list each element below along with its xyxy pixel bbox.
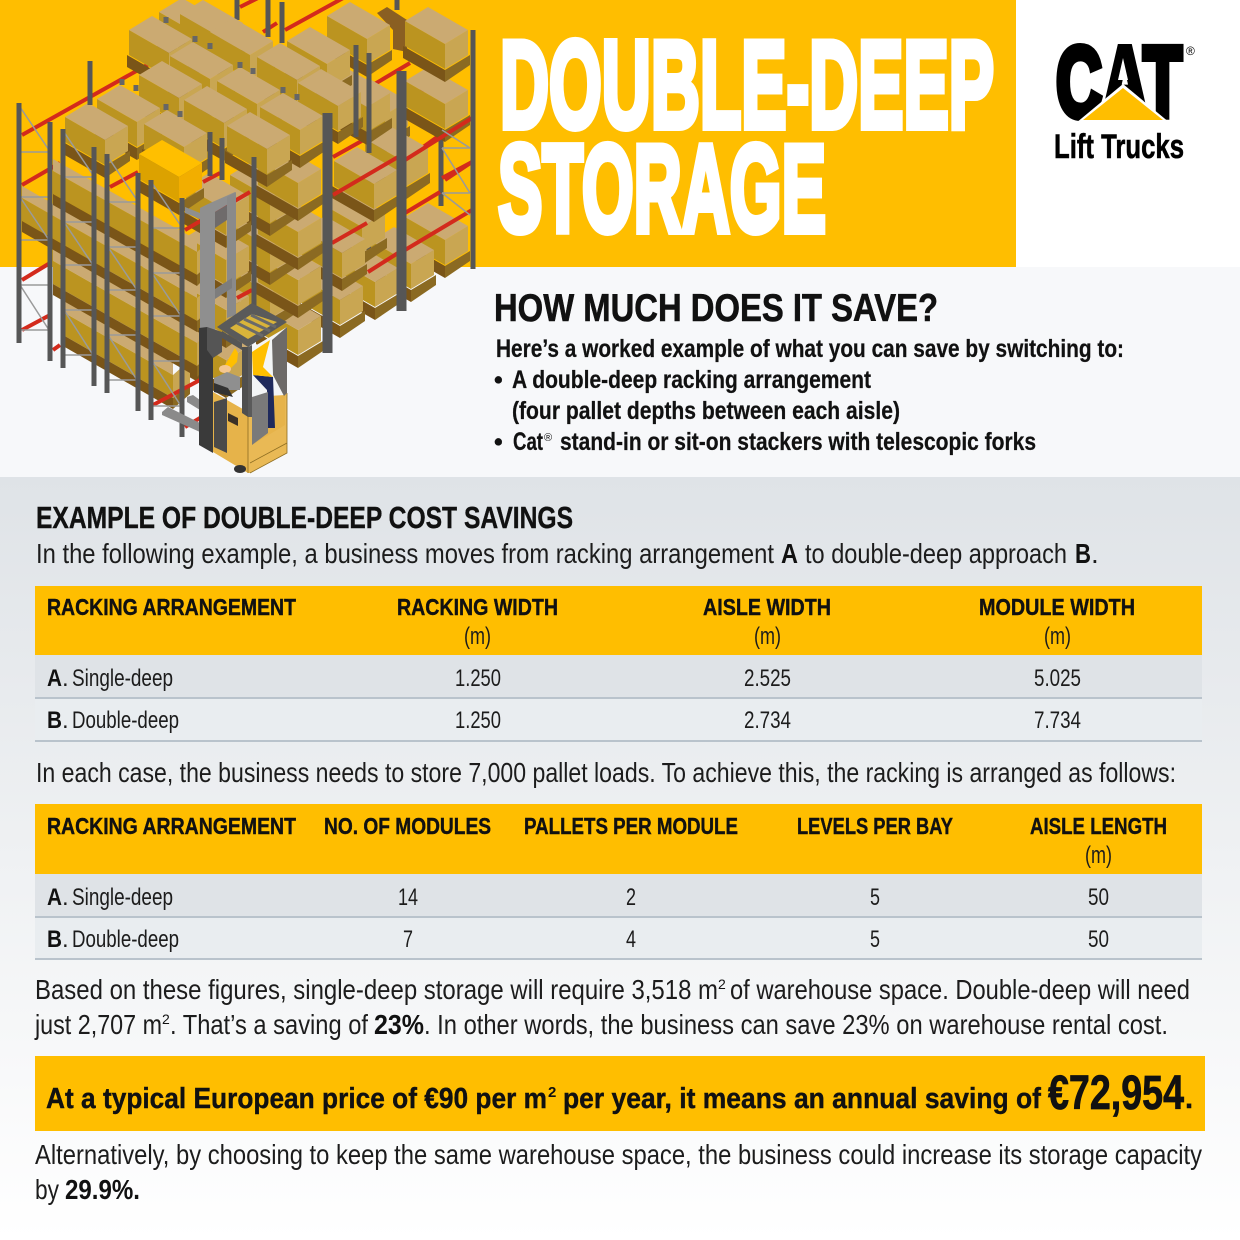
table 2: racking layout: Single-deep [72, 884, 173, 911]
heading: how much does it save: HOW MUCH DOES IT SAVE? [494, 287, 938, 330]
table 2: racking layout: 50 [1088, 884, 1109, 911]
rear upright stubs [369, 133, 441, 252]
table 1: racking dimensions: (m) [1044, 623, 1071, 650]
table 2: racking layout: PALLETS PER MODULE [524, 813, 738, 839]
rack connectors between loads [122, 17, 297, 117]
table 1: racking dimensions: . [62, 665, 69, 692]
background: lower panel [0, 477, 1240, 1240]
highlighted yellow load [137, 140, 204, 215]
cabin interior and operator [214, 327, 287, 445]
table 2: racking layout: 2 [626, 884, 636, 911]
table 1: racking dimensions: RACKING ARRANGEMENT [47, 594, 296, 620]
intro sentence: In the following example, a business moves from racking arrangement [36, 538, 774, 569]
callout: annual saving: 2 [548, 1084, 556, 1101]
table 2: racking layout: RACKING ARRANGEMENT [47, 813, 296, 839]
reach truck [162, 192, 287, 473]
heading: example of cost savings: EXAMPLE OF DOUBLE-DEEP COST SAVINGS [36, 500, 573, 535]
table 2: racking layout: . [62, 884, 69, 911]
table 1: racking dimensions: (m) [464, 623, 491, 650]
results paragraph: 23% [374, 1009, 424, 1040]
table 1: racking dimensions: 7.734 [1034, 707, 1081, 734]
intro bullet list: Cat [513, 428, 543, 456]
table 2: racking layout: 5 [870, 926, 880, 953]
intro sentence: to double-deep approach [805, 538, 1067, 569]
table 2: racking layout: . [62, 926, 69, 953]
background: intro band [0, 267, 1240, 477]
closing paragraph: 29.9%. [65, 1174, 140, 1205]
table 1: racking dimensions: 1.250 [455, 707, 501, 734]
intro sentence: A [781, 538, 798, 569]
table 1: racking dimensions: Single-deep [72, 665, 173, 692]
table 1: racking dimensions: B [47, 707, 62, 734]
table 2: racking layout: (m) [1085, 842, 1112, 869]
results paragraph [34, 974, 1190, 1040]
callout: annual saving: . [1185, 1083, 1193, 1115]
closing paragraph [35, 1139, 1202, 1205]
table 1: racking dimensions: MODULE WIDTH [979, 594, 1135, 620]
table 1: racking dimensions: RACKING WIDTH [397, 594, 558, 620]
carriage [199, 327, 222, 453]
cage [217, 303, 287, 417]
intro sentence: . [1091, 538, 1099, 569]
table 2: racking layout: AISLE LENGTH [1030, 813, 1167, 839]
table 1: racking dimensions: 2.734 [744, 707, 791, 734]
illustration: racking with stored pallets and reach truck [19, 0, 473, 473]
table 2: racking layout: B [47, 926, 62, 953]
callout: annual saving: per year, it means an annual saving of [563, 1083, 1041, 1115]
table 2: racking layout: NO. OF MODULES [324, 813, 491, 839]
table 1: racking dimensions [35, 586, 1202, 742]
results paragraph: 2 [718, 976, 726, 992]
intro bullet list: Here’s a worked example of what you can save by switching to: [496, 335, 1124, 363]
table 2: racking layout: A [47, 884, 62, 911]
table 2: racking layout: 14 [398, 884, 418, 911]
band: lowest level [63, 300, 190, 409]
mast [185, 192, 236, 333]
intro sentence: B [1075, 538, 1091, 569]
front red beams [53, 118, 472, 427]
rear uprights [237, 0, 397, 43]
stacked empty pallets [377, 7, 407, 52]
band: second level [53, 159, 205, 286]
truck body [213, 392, 287, 473]
table 1: racking dimensions: . [62, 707, 69, 734]
table 2: racking layout [35, 804, 1202, 960]
table 1: racking dimensions: 5.025 [1034, 665, 1081, 692]
table 2: racking layout: Double-deep [72, 926, 179, 953]
band: third level [22, 186, 205, 332]
table 2: racking layout: 4 [626, 926, 636, 953]
logo: Cat Lift Trucks: ® [1186, 44, 1195, 58]
background: top yellow banner [0, 0, 1016, 267]
intro bullet list: • [494, 428, 503, 456]
uprights [19, 30, 473, 437]
band: fourth level [53, 249, 205, 377]
table 1: racking dimensions: A [47, 665, 62, 692]
results paragraph: just 2,707 m [34, 1009, 162, 1040]
callout: annual saving: €72,954 [1048, 1067, 1184, 1120]
intro bullet list: ® [544, 432, 552, 444]
intro bullet list [494, 335, 1124, 456]
lower level long load bands, left [22, 159, 205, 409]
results paragraph: . That’s a saving of [170, 1009, 368, 1040]
callout: annual saving [35, 1056, 1205, 1131]
table 1: racking dimensions: (m) [754, 623, 781, 650]
table 1: racking dimensions: 1.250 [455, 665, 501, 692]
title: STORAGE [498, 120, 826, 258]
table 2: racking layout: 50 [1088, 926, 1109, 953]
table 1: racking dimensions: Double-deep [72, 707, 179, 734]
table 1: racking dimensions: AISLE WIDTH [703, 594, 831, 620]
table 1: racking dimensions: 2.525 [744, 665, 791, 692]
intro bullet list: • [494, 366, 503, 394]
table 2: racking layout: LEVELS PER BAY [797, 813, 953, 839]
logo: Cat Lift Trucks [1054, 26, 1195, 166]
table 2: racking layout: 5 [870, 884, 880, 911]
rear red beams [22, 0, 472, 330]
intro bullet list: (four pallet depths between each aisle) [512, 397, 900, 425]
logo: Cat Lift Trucks: Lift Trucks [1054, 128, 1184, 166]
top level boxes [63, 0, 470, 187]
table 2: racking layout: 7 [403, 926, 413, 953]
intro bullet list: A double-deep racking arrangement [512, 366, 872, 394]
intro bullet list: stand-in or sit-on stackers with telescopic forks [560, 428, 1036, 456]
callout: annual saving: At a typical European price of €90 per m [46, 1083, 547, 1115]
closing paragraph: by [35, 1174, 59, 1205]
results paragraph: 2 [162, 1011, 170, 1027]
brace frames [20, 107, 470, 406]
forks [162, 395, 200, 432]
results paragraph: Based on these figures, single-deep storage will require 3,518 m [35, 974, 718, 1005]
lower level boxes, right [184, 67, 470, 398]
title [498, 16, 994, 258]
